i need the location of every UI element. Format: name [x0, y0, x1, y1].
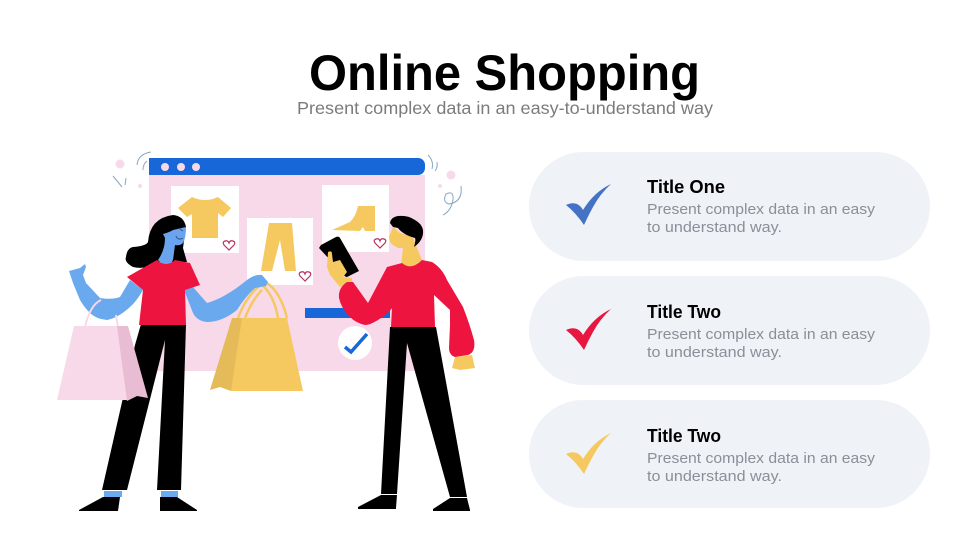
title: Online Shopping	[309, 45, 700, 101]
left arm and hand	[69, 264, 143, 320]
man trousers and shoes	[358, 327, 470, 511]
woman trousers and shoes	[79, 324, 197, 511]
card two description: Present complex data in an easy	[647, 326, 876, 343]
icon: yellow check	[566, 433, 611, 474]
hair	[126, 215, 187, 268]
item card three	[529, 400, 930, 508]
check badge	[338, 326, 372, 360]
yellow shopping bag	[210, 282, 303, 391]
product card: trousers	[247, 218, 313, 285]
red sweater	[339, 260, 474, 357]
man lower hand	[452, 355, 475, 370]
phone	[319, 237, 359, 277]
face and neck	[158, 227, 186, 265]
product card: t-shirt	[171, 186, 239, 253]
blue progress bar	[305, 308, 390, 318]
icon: blue check	[566, 184, 611, 225]
product card: boot	[322, 185, 389, 252]
woman figure	[57, 215, 268, 511]
man face and neck	[389, 227, 422, 268]
icon: red check	[566, 309, 611, 350]
item card two	[529, 276, 930, 385]
card three title: Title Two	[647, 426, 721, 446]
subtitle: Present complex data in an easy-to-understand way	[297, 98, 713, 118]
card one title: Title One	[647, 177, 725, 197]
phone hand	[327, 251, 352, 287]
illustration: online shopping scene	[57, 152, 475, 511]
card one description: to understand way.	[647, 219, 782, 236]
decorative marks left	[113, 152, 151, 188]
man figure	[319, 216, 475, 511]
item card one	[529, 152, 930, 261]
card two description: to understand way.	[647, 344, 782, 361]
card three description: Present complex data in an easy	[647, 450, 876, 467]
browser window	[149, 158, 425, 371]
man hair	[390, 216, 423, 247]
face details	[176, 229, 183, 239]
card one description: Present complex data in an easy	[647, 201, 876, 218]
red top	[127, 260, 200, 325]
card three description: to understand way.	[647, 468, 782, 485]
card two title: Title Two	[647, 302, 721, 322]
right arm	[184, 275, 268, 322]
decorative marks right	[428, 155, 461, 215]
pink shopping bag	[57, 300, 148, 401]
